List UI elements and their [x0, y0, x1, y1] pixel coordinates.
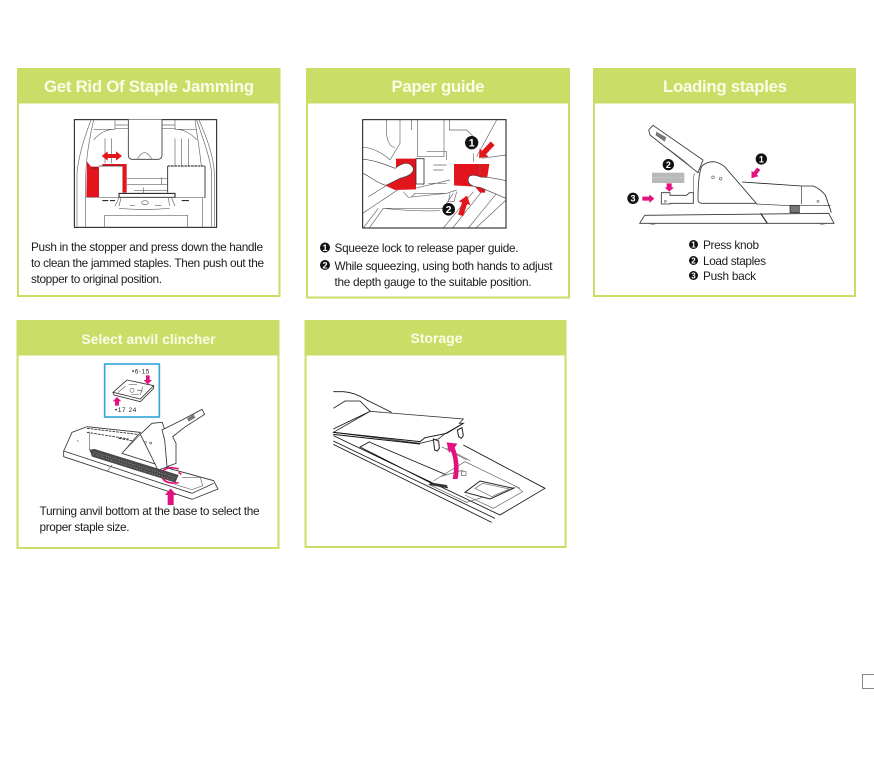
illustration: stapler side view: 3 — [630, 194, 635, 204]
heading: select anvil clincher: Select anvil clincher — [82, 332, 216, 347]
body text: loading steps: Press knob — [703, 238, 759, 252]
illustration: anvil clincher and stapler — [64, 364, 218, 505]
body text: loading steps: Push back — [703, 269, 756, 283]
panel: get rid of staple jamming — [17, 68, 280, 296]
body text: loading steps: 3 — [691, 272, 696, 280]
body text: paper guide steps — [320, 241, 553, 289]
illustration: stapler stopper top view — [74, 120, 217, 227]
header bar: paper guide — [306, 68, 570, 104]
inset: anvil plate: •17 24 — [115, 407, 137, 414]
panel: paper guide — [306, 68, 570, 298]
illustration: squeezing the paper guide: 1 — [469, 138, 475, 150]
body text: jamming: to clean the jammed staples. Then push out the — [31, 256, 264, 270]
body text: anvil clincher: Turning anvil bottom at the base to select the — [40, 504, 260, 518]
illustration: squeezing the paper guide — [363, 120, 506, 228]
body text: paper guide steps: the depth gauge to the suitable position. — [334, 275, 532, 289]
illustration: storage compartment — [333, 392, 545, 522]
body text: loading steps: 1 — [691, 240, 696, 250]
body text: jamming — [31, 240, 264, 286]
panel: loading staples — [593, 68, 856, 296]
body text: jamming: Push in the stopper and press down the handle — [31, 240, 263, 254]
illustration: stapler side view: 1 — [759, 154, 764, 164]
panel: select anvil clincher — [16, 320, 280, 548]
inset: anvil plate: •6-15 — [132, 368, 150, 375]
body text: paper guide steps: While squeezing, using both hands to adjust — [334, 259, 553, 273]
body text: paper guide steps: Squeeze lock to release paper guide. — [334, 241, 518, 255]
illustration: stapler side view — [627, 125, 834, 224]
heading: get rid of staple jamming: Get Rid Of Staple Jamming — [44, 77, 254, 96]
header bar: loading staples — [593, 68, 856, 104]
heading: loading staples: Loading staples — [663, 77, 787, 96]
body text: jamming: stopper to original position. — [31, 272, 162, 286]
body text: paper guide steps: 1 — [322, 243, 328, 253]
panel: storage — [304, 320, 566, 547]
illustration: stapler side view: 2 — [666, 160, 671, 170]
illustration: squeezing the paper guide: 2 — [446, 205, 452, 216]
body text: anvil clincher: proper staple size. — [40, 520, 130, 534]
stapler — [64, 427, 218, 499]
header bar: select anvil clincher — [16, 320, 280, 356]
body text: loading steps: Load staples — [703, 254, 766, 268]
heading: storage: Storage — [410, 330, 463, 346]
heading: paper guide: Paper guide — [392, 77, 484, 96]
body text: paper guide steps: 2 — [322, 260, 328, 270]
header bar: get rid of staple jamming — [17, 68, 280, 104]
body text: loading steps: 2 — [691, 256, 696, 266]
body text: anvil clincher — [40, 504, 260, 534]
page corner marker — [862, 674, 874, 688]
inset: anvil plate — [105, 364, 159, 417]
body text: loading steps — [689, 238, 766, 283]
header bar: storage — [304, 320, 566, 356]
